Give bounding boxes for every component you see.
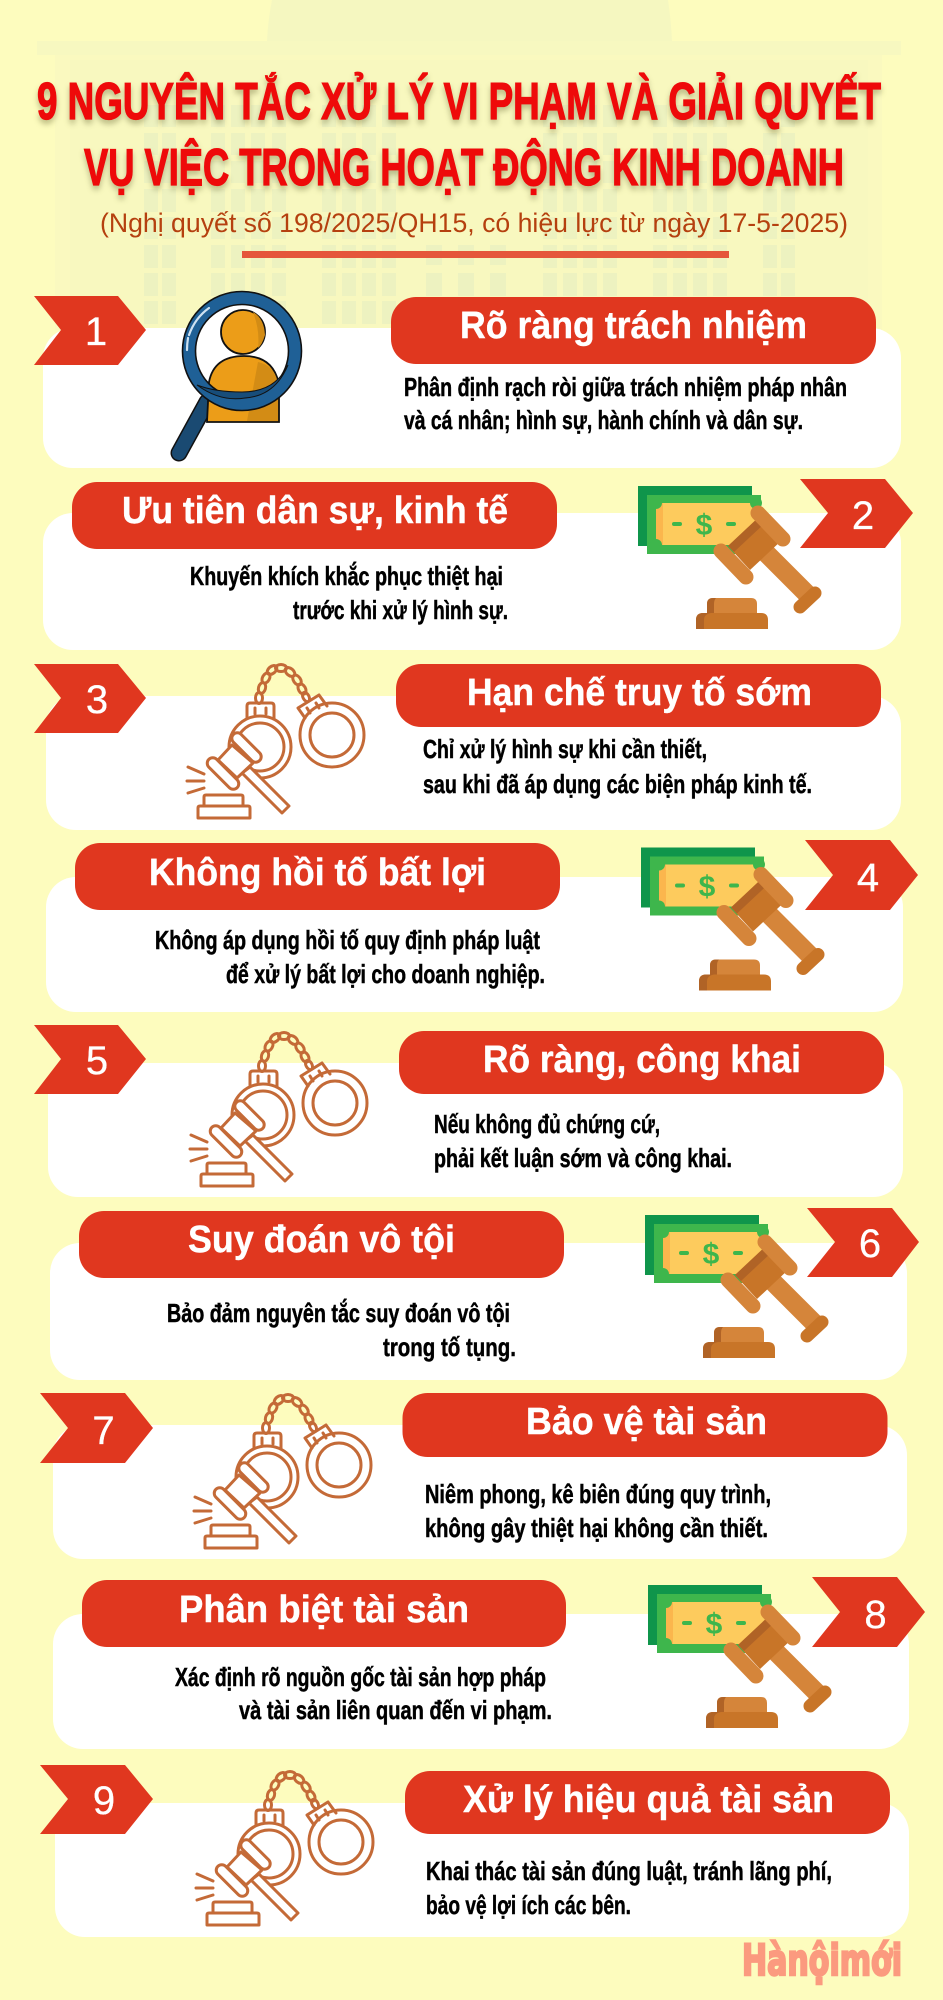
badge: number 8: 8 [864,1593,887,1637]
icon: handcuffs and gavel [194,1394,371,1548]
text block: không gây thiệt hại không cần thiết. [425,1513,768,1543]
icon: handcuffs and gavel [196,1771,373,1925]
badge: number 8 [812,1577,925,1647]
icon: money and gavel: $ [703,1238,720,1271]
text block: Niêm phong, kê biên đúng quy trình, [425,1479,771,1509]
heading pill [72,482,557,549]
heading pill [405,1771,890,1834]
text block [404,372,847,435]
heading pill [79,1211,564,1278]
badge: number 9: 9 [93,1779,115,1823]
text block [175,1662,552,1725]
heading pill: Phân biệt tài sản [179,1589,469,1631]
heading pill: Rõ ràng, công khai [483,1039,801,1081]
text block: và tài sản liên quan đến vi phạm. [239,1695,552,1725]
heading pill: Ưu tiên dân sự, kinh tế [122,490,509,532]
heading pill [75,843,560,910]
icon: money and gavel [638,486,815,629]
panel: principle 3 [34,664,901,830]
text block: Nếu không đủ chứng cứ, [434,1109,660,1139]
heading pill [402,1393,888,1457]
icon: money and gavel [641,848,818,990]
icon: money and gavel [645,1215,822,1358]
text block: trong tố tụng. [383,1332,516,1362]
panel: principle 7 [40,1393,907,1559]
icon: money and gavel [648,1585,825,1728]
heading pill: Hạn chế truy tố sớm [467,672,812,714]
badge: number 4: 4 [857,856,879,900]
text block: Chỉ xử lý hình sự khi cần thiết, [423,734,707,764]
text block: bảo vệ lợi ích các bên. [426,1890,631,1920]
heading pill: Suy đoán vô tội [188,1219,455,1261]
text block: Không áp dụng hồi tố quy định pháp luật [155,925,540,955]
panel: principle 4 [46,840,918,1012]
heading pill [82,1580,566,1647]
badge: number 2: 2 [852,494,874,538]
badge: number 1: 1 [85,310,107,354]
subtitle: (Nghị quyết số 198/2025/QH15, có hiệu lực từ ngày 17-5-2025) [100,208,848,238]
badge: number 9 [40,1765,153,1834]
heading pill [396,664,881,727]
text block: sau khi đã áp dụng các biện pháp kinh tế. [423,769,812,799]
badge: number 6 [807,1208,919,1277]
badge: number 5 [34,1025,146,1094]
text block: Xác định rõ nguồn gốc tài sản hợp pháp [175,1662,546,1692]
text block: để xử lý bất lợi cho doanh nghiệp. [226,959,545,989]
heading pill [391,297,876,364]
heading pill: Xử lý hiệu quả tài sản [463,1779,834,1821]
panel: principle 8 [53,1577,925,1749]
text block: Khuyến khích khắc phục thiệt hại [190,561,503,591]
icon: money and gavel: $ [699,870,716,904]
icon: money and gavel: $ [696,509,713,542]
panel: principle 9 [40,1765,909,1937]
badge: number 2 [800,479,913,548]
text block: trước khi xử lý hình sự. [293,595,508,625]
heading pill: Bảo vệ tài sản [526,1401,767,1443]
text block: phải kết luận sớm và công khai. [434,1143,732,1173]
background: parliament building [37,0,901,330]
text block: Bảo đảm nguyên tắc suy đoán vô tội [167,1298,510,1328]
text block: Khai thác tài sản đúng luật, tránh lãng phí, [426,1856,832,1886]
badge: number 7 [40,1393,153,1463]
text block: và cá nhân; hình sự, hành chính và dân sự. [404,405,803,435]
panel: principle 2 [43,479,913,650]
text block [155,925,545,989]
text block [426,1856,832,1920]
icon: magnifier over person [179,292,302,453]
panel: principle 5 [34,1025,903,1197]
badge: number 4 [805,840,918,910]
panel: principle 1 [34,292,901,468]
badge: number 3 [34,664,146,733]
text block [190,561,508,625]
text block [423,734,812,799]
text block [425,1479,771,1543]
badge: number 5: 5 [86,1039,108,1083]
badge: number 1 [34,296,146,365]
icon: money and gavel: $ [706,1608,723,1641]
title [37,72,881,197]
text block [434,1109,732,1173]
heading pill: Không hồi tố bất lợi [149,852,486,894]
text block [167,1298,516,1362]
title underline [242,251,729,258]
heading pill [399,1031,884,1094]
badge: number 7: 7 [92,1409,115,1453]
panel: principle 6 [50,1208,919,1380]
icon: handcuffs and gavel [187,664,364,818]
badge: number 6: 6 [859,1222,881,1266]
badge: number 3: 3 [86,678,108,722]
icon: handcuffs and gavel [190,1032,367,1186]
heading pill: Rõ ràng trách nhiệm [460,305,807,347]
